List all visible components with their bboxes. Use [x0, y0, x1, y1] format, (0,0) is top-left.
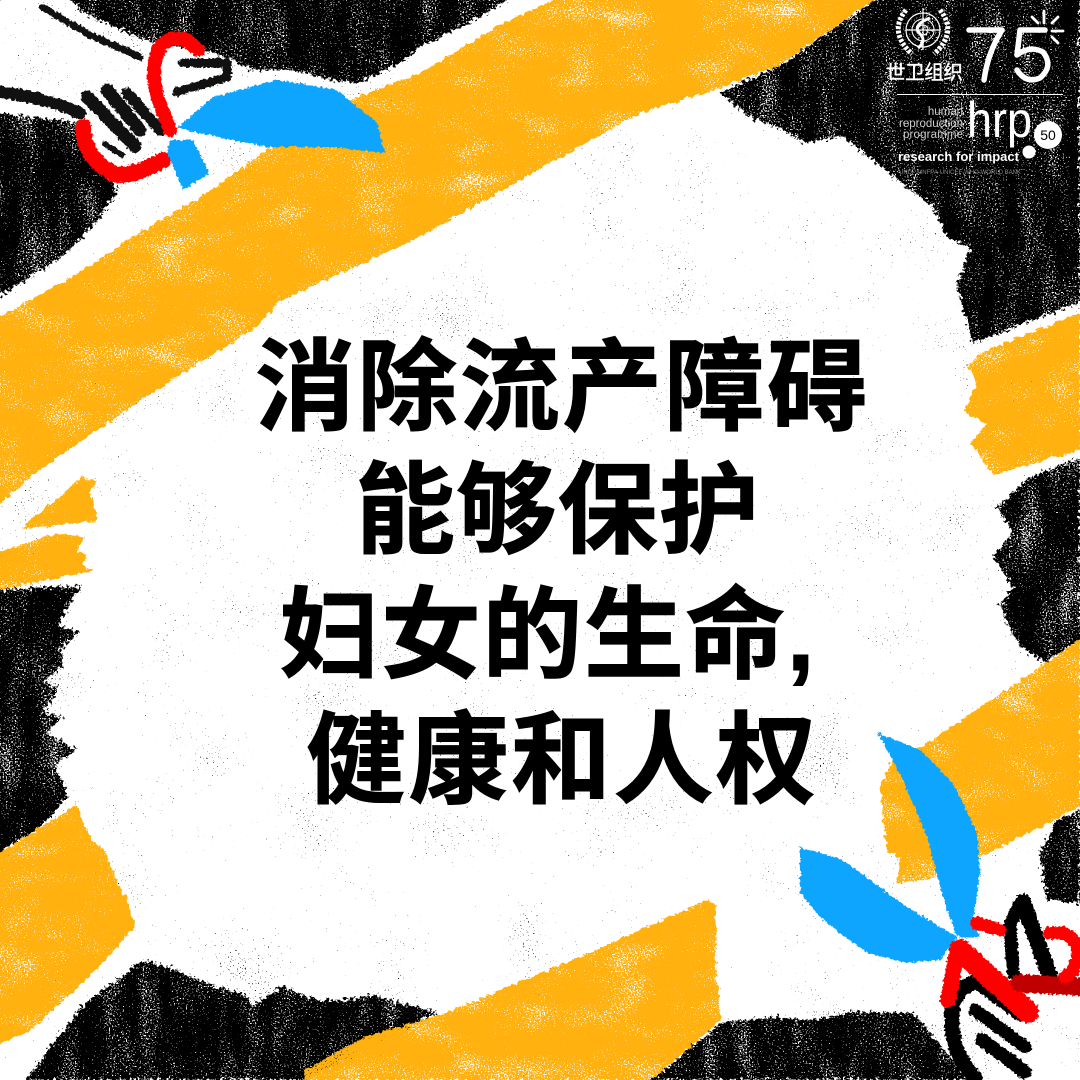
HRP sponsors: UNDP·UNFPA·UNICEF·WHO·WORLD BANK	[899, 169, 1022, 176]
bottom-left black scribble	[25, 960, 438, 1080]
left yellow stroke	[0, 478, 97, 592]
HRP descriptor: human	[928, 106, 963, 118]
left black scribble	[0, 586, 83, 858]
HRP descriptor: programme	[903, 129, 963, 141]
title line 4: 健康和人权	[306, 705, 816, 817]
blue blades	[167, 80, 385, 190]
illustration: bottom-right scissors	[800, 733, 1080, 1078]
right black scribble	[993, 458, 1080, 662]
research for impact: research for impact	[898, 150, 1020, 164]
red loops	[83, 38, 198, 175]
main diagonal yellow band	[0, 0, 888, 512]
HRP descriptor	[899, 106, 963, 141]
lower-right black scribble	[1040, 810, 1080, 903]
black handles	[952, 902, 1050, 1078]
red loops	[948, 923, 1080, 1012]
title line 1: 消除流产障碍	[255, 332, 867, 444]
blue blades	[800, 733, 980, 963]
75 anniversary mark	[969, 11, 1063, 80]
logo block	[886, 8, 1063, 176]
right yellow stroke	[963, 313, 1080, 475]
title line 2: 能够保护	[355, 455, 759, 567]
upper-left black scribble	[0, 112, 117, 302]
top black scribble	[63, 0, 525, 83]
HRP dot and 50 badge: 50	[1040, 127, 1056, 143]
WHO emblem	[898, 8, 948, 54]
title	[255, 332, 867, 817]
HRP descriptor: reproduction	[899, 118, 963, 130]
top-right black scribble	[720, 0, 1080, 343]
illustration: top-left scissors	[0, 7, 385, 190]
lower-right yellow stroke	[880, 640, 1080, 883]
WHO Chinese name: 世卫组织	[886, 62, 963, 84]
title line 3: 妇女的生命,	[280, 580, 814, 692]
bottom-right black scribble	[651, 1012, 967, 1080]
scissor handles, black strokes	[0, 7, 227, 155]
HRP dot and 50 badge	[1022, 121, 1062, 158]
logo divider	[897, 94, 1063, 95]
bottom yellow stroke	[304, 900, 721, 1080]
lower-left yellow stroke	[0, 804, 135, 1049]
HRP wordmark: hrp	[967, 92, 1032, 148]
